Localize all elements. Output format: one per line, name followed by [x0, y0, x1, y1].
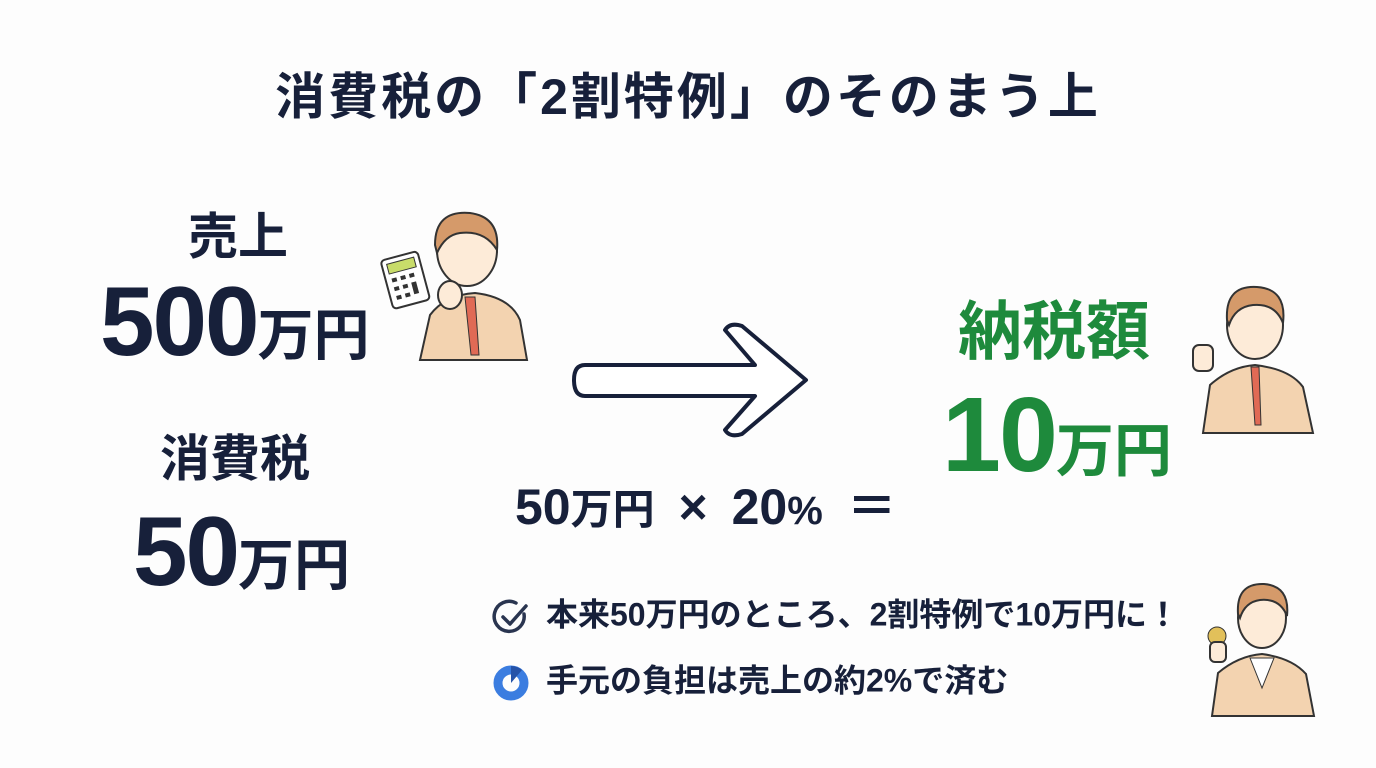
character: man with coin [1208, 583, 1316, 717]
character: thinking man with calculator [380, 212, 528, 361]
formula: 50万円 × 20% ＝ [515, 479, 897, 535]
bullet 1: 本来50万円のところ、2割特例で10万円に！ [546, 596, 1179, 632]
title: 消費税の「2割特例」のそのまう上 [275, 69, 1101, 125]
arrow [572, 322, 808, 438]
character: thumbs up man [1192, 286, 1314, 434]
value: tax 50: 50万円 [133, 496, 350, 606]
label: consumption tax: 消費税 [160, 431, 310, 487]
label: sales: 売上 [188, 209, 288, 265]
bullet list [492, 596, 1179, 700]
label: tax payment: 納税額 [958, 296, 1150, 368]
value: sales 500: 500万円 [100, 266, 370, 376]
value: 10: 10万円 [942, 376, 1172, 494]
bullet 2: 手元の負担は売上の約2%で済む [546, 662, 1008, 698]
